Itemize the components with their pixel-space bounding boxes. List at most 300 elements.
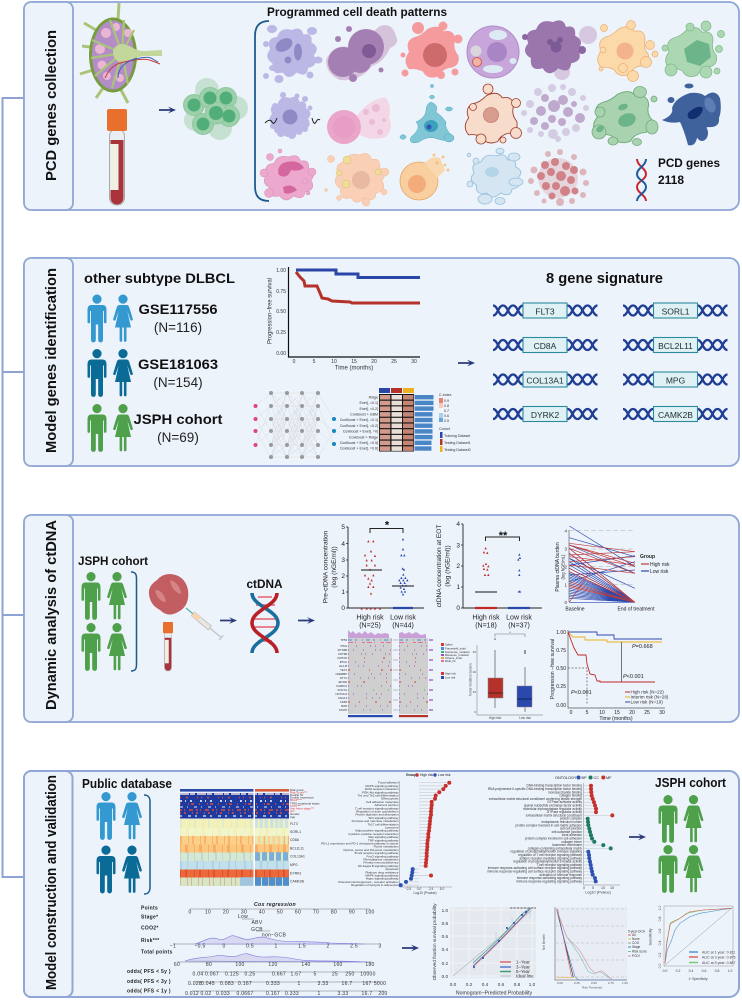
chart: mutation oncoplot: HLA-B — [339, 664, 347, 668]
chart: nomogram Cox regression: 80 — [206, 962, 212, 968]
chart: nomogram Cox regression: 0 — [222, 944, 226, 950]
chart: nomogram Cox regression: odds( PFS < 1y ) — [127, 988, 171, 994]
arrow — [458, 360, 475, 366]
chart: pathway enrichment dot plot: Chemical carcinogenesis - receptor activation — [338, 880, 399, 884]
chart: GO enrichment lollipop: collagen-containing extracellular matrix — [528, 846, 582, 850]
legend: C-index and cohort — [439, 393, 471, 452]
chart: GO enrichment lollipop: antigen receptor-mediated signaling pathway — [519, 856, 582, 860]
chart: clinical and gene expression heatmap: COO**** — [290, 804, 302, 808]
cell 2 — [326, 25, 397, 82]
chart: nomogram Cox regression: 0.333 — [266, 981, 280, 987]
chart: calibration curve: Observed fraction survival probability — [432, 903, 437, 980]
chart: nomogram Cox regression: 5000 — [374, 981, 386, 987]
legend: DCA: 5-year-DCA — [628, 930, 646, 934]
chart: pathway enrichment dot plot: Focal adhesion — [378, 781, 399, 785]
chart: mutation oncoplot: TET2 — [340, 668, 347, 672]
chart: progression-free survival by risk: 25 — [644, 710, 650, 716]
chart: calibration curve: 0.0 — [442, 974, 448, 979]
chart: pathway enrichment dot plot: Regulation of actin cytoskeleton — [356, 810, 399, 814]
chart: pathway enrichment dot plot: Cytokine-cytokine receptor interaction — [348, 832, 399, 836]
legend: calibration: 5−Year — [516, 969, 530, 974]
chart: progression-free survival by risk: P<0.001 — [571, 690, 592, 696]
legend: DCA: Stage — [632, 945, 641, 949]
heading: JSPH cohort: JSPH cohort — [78, 556, 148, 568]
chart: calibration curve: 0.2 — [466, 982, 473, 987]
chart: nomogram Cox regression: non−GCB — [262, 932, 286, 938]
chart: clinical and gene expression heatmap: TP53 mutational status — [290, 802, 320, 806]
chart: progression-free survival: 15 — [351, 359, 357, 365]
panel: Model genes identification — [24, 258, 739, 466]
cohort: JSPH: (N=69) — [157, 430, 199, 445]
chart: nomogram Cox regression: 0.25 — [245, 972, 255, 978]
legend: C-index and cohort: 0.9 — [444, 399, 449, 403]
chart: ROC curves: AUC at 3 year: 0.875 — [702, 956, 736, 960]
chart: nomogram Cox regression: Risk*** — [141, 938, 160, 944]
chart: pathway enrichment dot plot: PI3K-Akt signaling pathway — [362, 790, 399, 794]
chart: GO enrichment lollipop: GTPase activator activity — [547, 800, 582, 804]
chart: nomogram Cox regression: 0.0667 — [236, 991, 254, 997]
chart: nomogram Cox regression: Total points — [141, 950, 173, 956]
chart: ctDNA concentration at EOT scatter: (log (hGE/ml)) — [444, 545, 452, 587]
chart: nomogram Cox regression: 80 — [331, 910, 337, 916]
cohort: JSPH: JSPH cohort — [134, 411, 223, 427]
chart: mutation oncoplot: B2M — [341, 704, 348, 708]
bracket — [144, 795, 150, 894]
legend: oncoplot: Missense_mutation — [445, 653, 470, 657]
chart: GO enrichment lollipop: 0 — [583, 886, 585, 890]
gene: SORL1: SORL1 — [662, 306, 690, 316]
chart: plasma ctDNA burden lines: 1 — [564, 582, 567, 588]
chart: pathway enrichment dot plot: −2.5 — [405, 887, 411, 891]
chart: pre-ctDNA concentration scatter: 4 — [341, 541, 345, 548]
chart: C-index heatmap: CoxBoost + Enet[, =0.2] — [340, 424, 378, 428]
chart: tumor mutation burden boxplot: 30 — [473, 650, 476, 654]
chart: clinical and gene expression heatmap: CAMK2B — [290, 880, 305, 884]
cell 13 — [592, 86, 658, 146]
chart: clinical and gene expression heatmap: BCL6**** — [290, 798, 303, 802]
chart: C-index heatmap: CoxBoost + Enet[, =0] — [343, 430, 378, 434]
chart: GO enrichment lollipop: basement membrane — [552, 843, 582, 847]
chart: GO enrichment lollipop: protein complex — [560, 817, 582, 821]
chart: nomogram Cox regression: COO2* — [141, 926, 159, 932]
gene: MPG: MPG — [666, 375, 685, 385]
cell 18 — [467, 148, 523, 204]
legend: DCA: All — [632, 933, 636, 937]
chart: clinical and gene expression heatmap: Risk Score*** — [290, 790, 308, 794]
chart: pre-ctDNA concentration scatter: Pre-ctDNA concentration — [322, 530, 330, 603]
chart: progression-free survival by risk: Time (months) — [599, 716, 633, 722]
chart: nomogram Cox regression: 0.033 — [216, 991, 230, 997]
chart: nomogram Cox regression: 0.067 — [205, 972, 219, 978]
gene: BCL2L11: BCL2L11 — [658, 341, 693, 351]
chart: C-index heatmap: Enet[, =0.2] — [360, 407, 378, 411]
legend: oncoplot: Frameshift_indel — [445, 646, 466, 650]
chart: calibration curve: 0.6 — [442, 934, 448, 939]
legend: group — [406, 773, 451, 777]
chart: pathway enrichment dot plot: Th17 cell differentiation — [368, 822, 399, 826]
legend: calibration — [500, 960, 534, 978]
chart: nomogram Cox regression: 0.045 — [201, 981, 215, 987]
chart: nomogram Cox regression: 250 — [345, 972, 355, 978]
gene: CD8A: CD8A — [534, 341, 557, 351]
chart: mutation oncoplot: PIM1 — [340, 644, 347, 648]
chart: plasma ctDNA burden lines: 0 — [564, 600, 567, 605]
icon: lymph node — [80, 3, 162, 103]
chart: pathway enrichment dot plot — [321, 773, 452, 895]
arrow — [159, 107, 176, 113]
legend: ontology: MF — [606, 776, 612, 780]
label: PCD genes collection: PCD genes collection — [44, 30, 60, 181]
legend: ontology: BP — [582, 776, 587, 780]
chart: calibration curve: 0.0 — [450, 982, 457, 987]
gene: COL13A1: COL13A1 — [526, 375, 564, 385]
chart: ROC curves: 1.0 — [658, 906, 662, 910]
chart: progression-free survival: 1.00 — [276, 268, 286, 274]
gene: FLT3: FLT3 — [535, 306, 555, 316]
chart: clinical and gene expression heatmap: Double expression — [290, 796, 314, 800]
chart: progression-free survival: 10 — [331, 359, 337, 365]
legend: group: Low risk — [438, 773, 451, 777]
chart: ROC curves: 1−Specificity — [688, 977, 708, 981]
cell 5 — [522, 20, 597, 80]
chart: ROC curves: 0.4 — [658, 941, 662, 945]
chart: tumor mutation burden boxplot: 0 — [474, 710, 476, 714]
chart: plasma ctDNA burden lines — [555, 526, 670, 612]
chart: nomogram Cox regression: 60 — [295, 910, 301, 916]
chart: nomogram Cox regression: 100 — [235, 962, 245, 968]
panel: Dynamic analysis of ctDNA — [24, 515, 739, 722]
chart: GO enrichment lollipop: T cell receptor signaling pathway — [536, 863, 582, 867]
chart: clinical and gene expression heatmap: BCL2L11 — [290, 846, 304, 850]
cell grid: programmed cell death patterns — [260, 20, 724, 206]
chart: ROC curves: 0.8 — [715, 969, 719, 973]
chart: nomogram Cox regression: Cox regression — [254, 902, 296, 908]
chart: nomogram Cox regression: 50 — [277, 910, 283, 916]
chart: tumor mutation burden boxplot: High risk — [489, 716, 502, 720]
chart: clinical and gene expression heatmap: MPG — [290, 863, 298, 867]
chart: GO enrichment lollipop: immune response-activating signaling pathway — [517, 876, 582, 880]
chart: clinical and gene expression heatmap: Risk group — [290, 788, 304, 792]
chart: C-index heatmap: CoxBoost + Enet[, =0.6] — [340, 446, 378, 450]
chart: GO enrichment lollipop: molecular-triphosphatase regulator activity — [523, 807, 582, 811]
chart: C-index heatmap — [340, 388, 471, 452]
legend: DCA: Risk score — [632, 950, 647, 954]
chart: mutation oncoplot: DTX1 — [340, 676, 347, 680]
gene: BCL2L11 — [623, 338, 728, 352]
chart: pathway enrichment dot plot: Glycine, serine and threonine metabolism — [343, 848, 399, 852]
chart: pathway enrichment dot plot: Wnt signaling pathway — [368, 816, 399, 820]
chart: mutation oncoplot — [335, 630, 470, 717]
chart: ctDNA concentration at EOT scatter: Low risk — [506, 614, 532, 622]
chart: ctDNA concentration at EOT scatter: (N=37) — [508, 622, 530, 630]
chart: ROC curves: 0.0 — [658, 964, 662, 968]
connector lines between panels — [2, 98, 24, 877]
chart: progression-free survival: Time (months) — [335, 366, 373, 372]
chart: pathway enrichment dot plot: MAPK signaling pathway — [365, 784, 399, 788]
cohort: GSE181063: GSE181063 — [138, 356, 218, 372]
chart: pre-ctDNA concentration scatter: (N=25) — [359, 622, 381, 630]
chart: nomogram Cox regression: 25 — [332, 972, 338, 978]
chart: pathway enrichment dot plot: PD-L1 expression and PD-1 checkpoint pathway in cancer — [321, 842, 398, 846]
chart: nomogram Cox regression: 160 — [333, 962, 343, 968]
legend: group: High risk — [420, 773, 433, 777]
chart: calibration curve — [432, 903, 536, 996]
arrow — [402, 945, 419, 951]
chart: decision curve analysis: 0.75 — [608, 981, 614, 985]
chart: nomogram Cox regression: 200 — [378, 991, 388, 997]
chart: progression-free survival by risk — [550, 630, 669, 722]
chart: tumor mutation burden boxplot — [468, 630, 543, 720]
legend: risk group: Group — [640, 554, 655, 560]
chart: tumor mutation burden boxplot: Low risk — [519, 716, 531, 720]
chart: ROC curves: 1.0 — [728, 969, 732, 973]
chart: calibration curve: 0.8 — [442, 921, 448, 926]
legend: C-index and cohort: Cohort — [439, 427, 450, 431]
heading: Public database: Public database — [82, 777, 172, 791]
arrow — [220, 617, 237, 624]
text: PCD genes 2118 — [658, 158, 720, 187]
chart: C-index heatmap: CoxBoost + Ridge — [349, 436, 378, 440]
legend: DCA: None — [632, 937, 640, 941]
chart: GO enrichment lollipop: immune response-regulating cell surface receptor signaling pathway — [487, 870, 582, 874]
chart: nomogram Cox regression: 30 — [241, 910, 247, 916]
chart: ROC curves — [648, 906, 736, 981]
chart: ctDNA concentration at EOT scatter: 0 — [456, 605, 460, 612]
chart: GO enrichment lollipop: focal adhesion — [562, 833, 582, 837]
chart: progression-free survival: 0.75 — [276, 289, 286, 295]
label: Model genes identification: Model genes identification — [44, 268, 60, 453]
chart: nomogram Cox regression: 20 — [223, 910, 229, 916]
cell 1 — [263, 25, 322, 83]
chart: pathway enrichment dot plot: TNF signaling pathway — [368, 838, 399, 842]
chart: plasma ctDNA burden lines: (log hGE/mL) — [560, 554, 566, 579]
chart: decision curve analysis: 0.25 — [574, 981, 580, 985]
panel: PCD genes collection — [24, 2, 739, 210]
chart: GO enrichment lollipop: 5 — [592, 886, 594, 890]
cohort: GSE181063: (N=154) — [153, 375, 203, 390]
icon: syringe — [184, 606, 223, 640]
chart: ctDNA concentration at EOT scatter: High risk — [472, 614, 500, 622]
chart: ROC curves: 0.2 — [658, 953, 662, 957]
chart: decision curve analysis: Net Benefit — [542, 934, 546, 950]
chart: calibration curve: 0.4 — [482, 982, 489, 987]
chart: GO enrichment lollipop: DNA-binding transcription factor binding — [526, 784, 582, 788]
chart: plasma ctDNA burden lines: End of treatment — [618, 606, 655, 612]
chart: pathway enrichment dot plot: FoxO signaling pathway — [366, 854, 399, 858]
legend: oncoplot: Inframe_indel — [445, 656, 462, 660]
legend: ontology: CC — [594, 776, 599, 780]
chart: clinical and gene expression heatmap: DYRK2 — [290, 872, 301, 876]
chart: pathway enrichment dot plot: Efferocytosis — [381, 797, 399, 801]
chart: progression-free survival: Progression−free survival — [268, 278, 274, 344]
chart: decision curve analysis: 0.00 — [557, 981, 563, 985]
chart: ctDNA concentration at EOT scatter — [436, 521, 542, 630]
chart: nomogram Cox regression — [127, 902, 388, 997]
chart: GO enrichment lollipop: guanyl nucleotide exchange factor activity — [524, 804, 582, 808]
cell 12 — [521, 84, 589, 142]
chart: pathway enrichment dot plot: 0.0 — [417, 887, 421, 891]
chart: pathway enrichment dot plot: Regulation of lipolysis in adipocytes — [351, 883, 399, 887]
heading: Programmed cell death patterns: Programmed cell death patterns — [267, 5, 447, 19]
chart: nomogram Cox regression: −1 — [170, 944, 176, 950]
chart: calibration curve: 0.8 — [514, 982, 521, 987]
chart: GO enrichment lollipop: monosaccharide binding — [548, 790, 582, 794]
gene: FLT3 — [493, 303, 598, 318]
legend: risk strata — [625, 690, 669, 704]
chart: progression-free survival by risk: 10 — [599, 710, 605, 716]
chart: nomogram Cox regression: 0.083 — [220, 981, 234, 987]
chart: nomogram Cox regression: 0 — [188, 910, 192, 916]
chart: nomogram Cox regression: 3.33 — [338, 991, 348, 997]
chart: C-index heatmap: Ridge — [369, 396, 378, 400]
legend: group: Group — [406, 773, 416, 777]
chart: pathway enrichment dot plot: Cell adhesion molecules — [366, 800, 399, 804]
chart: GO enrichment lollipop: RNA polymerase II-specific DNA-binding transcription factor binding — [488, 787, 582, 791]
legend: oncoplot: Multi_hit — [445, 659, 456, 663]
legend: risk group: High risk — [650, 562, 670, 568]
chart: GO enrichment lollipop: extracellular matrix structural constituent conferring tensile strength — [489, 797, 582, 801]
chart: pre-ctDNA concentration scatter: 1 — [341, 589, 345, 596]
heading: other subtype DLBCL: other subtype DLBCL — [84, 270, 235, 286]
chart: pre-ctDNA concentration scatter: 3 — [341, 557, 345, 564]
chart: ROC curves: AUC at 1 year: 0.811 — [702, 950, 735, 954]
chart: mutation oncoplot: STAT6 — [339, 708, 347, 712]
chart: tumor mutation burden boxplot: * — [509, 630, 511, 635]
gene: DYRK2: DYRK2 — [531, 410, 559, 420]
chart: ctDNA concentration at EOT scatter: ** — [499, 530, 508, 542]
chart: tumor mutation burden boxplot: 20 — [473, 670, 476, 674]
chart: GO enrichment lollipop: 15 — [610, 886, 614, 890]
chart: pathway enrichment dot plot: Apoptosis — [385, 867, 399, 871]
legend: C-index and cohort: 0.8 — [444, 404, 449, 408]
legend: oncoplot: Low risk — [445, 676, 456, 680]
chart: GO enrichment lollipop: immune response-regulating signaling pathway — [516, 879, 582, 883]
chart: pathway enrichment dot plot: Th1 and Th2 cell differentiation — [357, 794, 399, 798]
chart: GO enrichment lollipop: regulation of T cell receptor signaling pathway — [518, 853, 582, 857]
gene: MPG — [623, 372, 728, 387]
gene: CD8A — [493, 338, 598, 352]
chart: clinical and gene expression heatmap: FLT3 — [290, 822, 298, 826]
legend: DCA: COO — [632, 941, 640, 945]
chart: progression-free survival by risk: 0.50 — [556, 666, 566, 672]
gene: CAMK2B — [623, 406, 728, 422]
chart: pathway enrichment dot plot: Lysosome — [385, 826, 399, 830]
chart: ctDNA concentration at EOT scatter: 3 — [456, 542, 460, 550]
chart: nomogram Cox regression: 10000 — [360, 972, 376, 978]
chart: GO enrichment lollipop: extracellular matrix structural constituent — [526, 813, 582, 817]
chart: nomogram Cox regression: 90 — [349, 910, 355, 916]
icon: patients — [96, 792, 142, 893]
icon: tumour tissue — [149, 574, 188, 615]
chart: nomogram Cox regression: 5 — [313, 972, 317, 978]
chart: pre-ctDNA concentration scatter — [322, 520, 424, 630]
label: PCD genes collection — [24, 2, 73, 210]
chart: nomogram Cox regression: 1 — [274, 944, 278, 950]
chart: pathway enrichment dot plot: 5.0 — [440, 887, 444, 891]
chart: plasma ctDNA burden lines: 3 — [564, 546, 567, 552]
cell 6 — [598, 20, 658, 82]
chart: nomogram Cox regression: 1 — [317, 991, 321, 997]
legend: DCA: PCDI — [632, 954, 640, 958]
icon: patients — [658, 795, 703, 893]
chart: nomogram Cox regression: 0.012 — [185, 991, 199, 997]
cell 14 — [662, 84, 721, 145]
icon: tumour cell cluster — [184, 78, 248, 140]
chart: progression-free survival: 0.25 — [276, 330, 286, 336]
cell 10 — [400, 84, 454, 143]
chart: mutation oncoplot: KMT2D — [338, 656, 347, 660]
chart: plasma ctDNA burden lines: Plasma ctDNA burden — [555, 542, 561, 592]
legend: C-index and cohort: 0.5 — [444, 419, 449, 423]
chart: tumor mutation burden boxplot: Tumor mutation burden — [468, 663, 472, 697]
icon: blood tube — [163, 622, 173, 671]
chart: mutation oncoplot: GNA13 — [338, 696, 347, 700]
chart: GO enrichment lollipop: cell-cell junction — [560, 827, 582, 831]
icon: patients — [82, 572, 127, 671]
chart: ROC curves: 0.8 — [658, 917, 662, 921]
chart: pathway enrichment dot plot: Phenylalanine metabolism — [363, 858, 399, 862]
chart: progression-free survival by risk: 0.75 — [556, 648, 566, 654]
chart: nomogram Cox regression: −0.5 — [194, 944, 206, 950]
cell 15 — [260, 149, 316, 200]
chart: pathway enrichment dot plot: Adherens junction — [374, 803, 399, 807]
chart: progression-free survival: 30 — [411, 359, 417, 365]
gene: DYRK2 — [493, 406, 598, 422]
chart: nomogram Cox regression: 2 — [326, 944, 330, 950]
label: Model genes identification — [24, 258, 73, 466]
chart: pre-ctDNA concentration scatter: * — [385, 520, 390, 532]
diagram: neural network — [254, 391, 336, 459]
chart: pathway enrichment dot plot: Fructose and mannose metabolism — [352, 819, 399, 823]
cell 11 — [465, 84, 522, 144]
chart: pathway enrichment dot plot: 2.5 — [429, 887, 433, 891]
chart: pathway enrichment dot plot: Protein digestion and absorption — [355, 813, 399, 817]
chart: nomogram Cox regression: 0.04 — [193, 972, 203, 978]
legend: C-index and cohort: C-index — [439, 393, 452, 397]
chart: progression-free survival by risk: 15 — [614, 710, 620, 716]
chart: pre-ctDNA concentration scatter: Low risk — [390, 614, 416, 622]
legend: ontology: ONTOLOGY — [555, 776, 577, 780]
cohort: GSE117556: GSE117556 — [138, 301, 218, 317]
chart: progression-free survival by risk: 20 — [629, 710, 635, 716]
arrow — [629, 834, 646, 840]
cell 8 — [265, 92, 320, 139]
chart: nomogram Cox regression: 10 — [205, 910, 211, 916]
chart: ROC curves: 0.4 — [689, 969, 693, 973]
gene: CAMK2B: CAMK2B — [658, 410, 693, 420]
cell 17 — [400, 154, 450, 200]
cohort: GSE117556: (N=116) — [154, 320, 202, 335]
chart: nomogram Cox regression: 140 — [301, 962, 311, 968]
chart: GO enrichment lollipop: protein complex involved in cell adhesion — [525, 836, 582, 840]
legend: oncoplot: Nonsense_mutation — [445, 650, 470, 654]
chart: pre-ctDNA concentration scatter: High risk — [356, 614, 384, 622]
chart: progression-free survival — [268, 267, 420, 372]
chart: nomogram Cox regression: 1.67 — [291, 972, 301, 978]
chart: nomogram Cox regression: ABV — [252, 920, 263, 926]
chart: clinical and gene expression heatmap: Ann Arbor stage*** — [290, 807, 315, 811]
chart: calibration curve: 0.4 — [442, 947, 448, 952]
chart: pre-ctDNA concentration scatter: 0 — [341, 605, 345, 612]
chart: GO enrichment lollipop: Log10 (Pvalue) — [585, 890, 612, 894]
legend: risk group: Low risk — [650, 569, 669, 575]
chart: clinical and gene expression heatmap: SORL1 — [290, 830, 301, 834]
chart: mutation oncoplot: CD58 — [340, 700, 347, 704]
legend: risk strata: Low risk (N=19) — [630, 700, 663, 704]
cell 9 — [327, 97, 391, 144]
icon: DNA double helix — [252, 593, 278, 653]
chart: pre-ctDNA concentration scatter: 2 — [341, 573, 345, 580]
